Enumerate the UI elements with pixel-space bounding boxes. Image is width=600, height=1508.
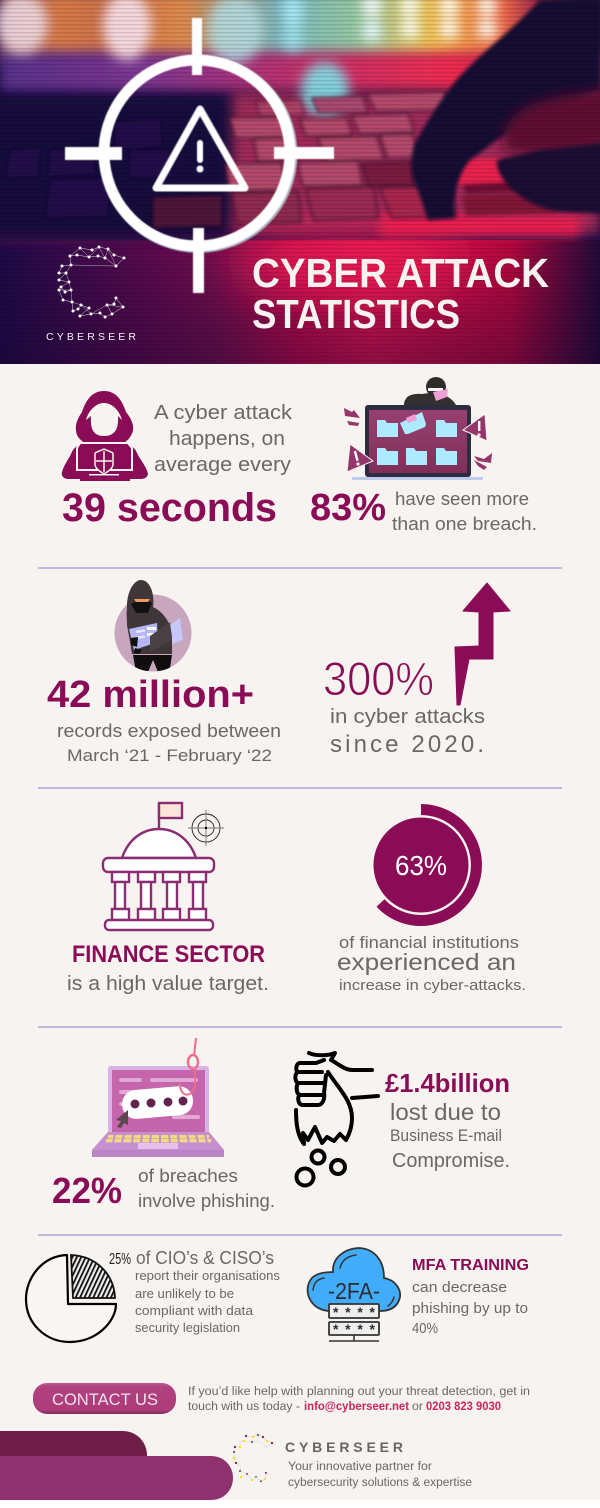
- icon: bank building with target: [103, 803, 214, 930]
- text: breach description: than one breach.: [392, 514, 537, 534]
- text: MFA description: phishing by up to: [412, 1300, 528, 1317]
- icon: hooded thief carrying card: [114, 580, 192, 672]
- text: in cyber attacks since 2020: since 2020.: [330, 731, 484, 758]
- title: STATISTICS: [252, 291, 460, 337]
- divider: [38, 1026, 562, 1028]
- text: of breaches involve phishing: of breaches: [138, 1166, 238, 1186]
- divider: [38, 567, 562, 569]
- number: 300%: 300%: [323, 652, 434, 705]
- target centre dot: [205, 827, 207, 829]
- text: cyber attack frequency: [154, 402, 293, 476]
- icon: 2FA cloud with password fields: [308, 1248, 400, 1341]
- text: of breaches involve phishing: involve phishing.: [138, 1191, 275, 1211]
- number: 39 seconds: 39 seconds: [62, 486, 277, 530]
- text: MFA description: can decrease: [412, 1279, 507, 1296]
- text: financial institutions: of financial institutions: [339, 933, 519, 952]
- crosshair target with warning triangle: [65, 18, 334, 293]
- text: CIO statement: security legislation: [135, 1321, 240, 1335]
- text: of breaches involve phishing: [138, 1166, 275, 1211]
- contact button: CONTACT US: [52, 1390, 158, 1409]
- text: financial institutions: increase in cyber-attacks.: [339, 977, 526, 994]
- text: breach description: [392, 489, 537, 534]
- title: CYBER ATTACK: [252, 250, 549, 296]
- number: 42 million+: 42 million+: [47, 674, 254, 716]
- contact text: or: [412, 1401, 423, 1413]
- text: financial institutions: [337, 933, 526, 994]
- divider: [38, 787, 562, 789]
- text: cyber attack frequency: happens, on: [169, 428, 285, 450]
- icon: hand holding torn money bag: [295, 1053, 378, 1186]
- text: CIO statement: compliant with data: [135, 1304, 253, 1318]
- text: high value target: is a high value target.: [67, 973, 269, 995]
- chart: 63% donut: [374, 810, 476, 920]
- contact text: If you’d like help with planning out your threat detection, get in: [188, 1386, 530, 1398]
- footer tagline: cybersecurity solutions & expertise: [288, 1477, 472, 1489]
- icon: thief stealing folders from laptop: [344, 377, 492, 480]
- icon: hooded hacker at laptop: [62, 391, 148, 481]
- text: financial institutions: experienced an: [337, 949, 516, 975]
- number: 83%: 83%: [310, 487, 386, 529]
- text: records exposed: [57, 721, 281, 765]
- stat: finance sector: [67, 803, 269, 995]
- text: lost due to BEC: [390, 1099, 510, 1172]
- text: in cyber attacks since 2020: in cyber attacks: [330, 706, 485, 728]
- contact text: 0203 823 9030: [426, 1401, 501, 1413]
- stat: 25% of CIOs and CISOs: [26, 1248, 280, 1342]
- contact button: [33, 1383, 176, 1414]
- stat: 22% phishing: [52, 1038, 275, 1211]
- text: records exposed: records exposed between: [57, 721, 281, 741]
- contact text: info@cyberseer.net: [304, 1401, 409, 1413]
- logo: Cyberseer network C: CYBERSEER: [46, 331, 136, 343]
- hero panel: [0, 0, 600, 364]
- icon: 2FA cloud with password fields: ****: [333, 1321, 376, 1337]
- hero photo background: keyboard and lights: [0, 0, 600, 364]
- heading: MFA training: MFA TRAINING: [412, 1257, 529, 1274]
- footer colour logo: [233, 1434, 273, 1482]
- number: 22%: 22%: [52, 1170, 122, 1211]
- footer decorative bands: [0, 1431, 233, 1500]
- text: records exposed: March ‘21 - February ‘22: [67, 746, 272, 765]
- stat: 39 seconds: [62, 391, 293, 530]
- stat: 1.4 billion lost: [295, 1053, 510, 1186]
- title: [253, 258, 548, 328]
- text: lost due to BEC: Compromise.: [392, 1150, 510, 1172]
- stat: 83% more than one breach: [310, 377, 537, 534]
- text: CIO statement: are unlikely to be: [135, 1287, 234, 1301]
- logo: Cyberseer network C: [46, 246, 136, 343]
- icon: 2FA cloud with password fields: -2FA-: [328, 1278, 380, 1304]
- text: in cyber attacks since 2020: [330, 706, 485, 758]
- icon: 2FA cloud with password fields: ****: [333, 1304, 376, 1320]
- text: CIO statement: [135, 1248, 280, 1335]
- number: 1.4 billion pounds: £1.4billion: [385, 1068, 510, 1098]
- stat: 63% financial institutions: [337, 810, 526, 994]
- stat: MFA training: [308, 1248, 529, 1341]
- chart: hand drawn 25% pie: [26, 1255, 116, 1342]
- text: MFA description: 40%: [412, 1320, 438, 1337]
- text: MFA description: [412, 1279, 528, 1337]
- footer brand name: CYBERSEER: [285, 1439, 403, 1455]
- chart: 63% donut: 63%: [395, 850, 447, 881]
- icon: laptop with phishing hook: [92, 1038, 224, 1157]
- contact text: touch with us today -: [188, 1401, 300, 1413]
- text: lost due to BEC: Business E-mail: [390, 1126, 502, 1145]
- stat: 300% increase: [323, 583, 510, 758]
- text: CIO statement: report their organisations: [135, 1269, 280, 1283]
- text: lost due to BEC: lost due to: [390, 1099, 501, 1125]
- footer tagline: Your innovative partner for: [288, 1461, 432, 1473]
- contact text: [188, 1386, 530, 1413]
- label: 25%: 25%: [109, 1251, 131, 1268]
- divider: [38, 1234, 562, 1236]
- icon: jagged up arrow: [455, 583, 510, 705]
- text: CIO statement: of CIO’s & CISO’s: [136, 1248, 274, 1268]
- text: cyber attack frequency: A cyber attack: [154, 402, 293, 424]
- footer tagline: [288, 1461, 472, 1489]
- text: breach description: have seen more: [395, 489, 529, 509]
- text: cyber attack frequency: average every: [154, 454, 291, 476]
- heading: finance sector: FINANCE SECTOR: [72, 941, 265, 968]
- stat: 42 million+: [47, 580, 281, 765]
